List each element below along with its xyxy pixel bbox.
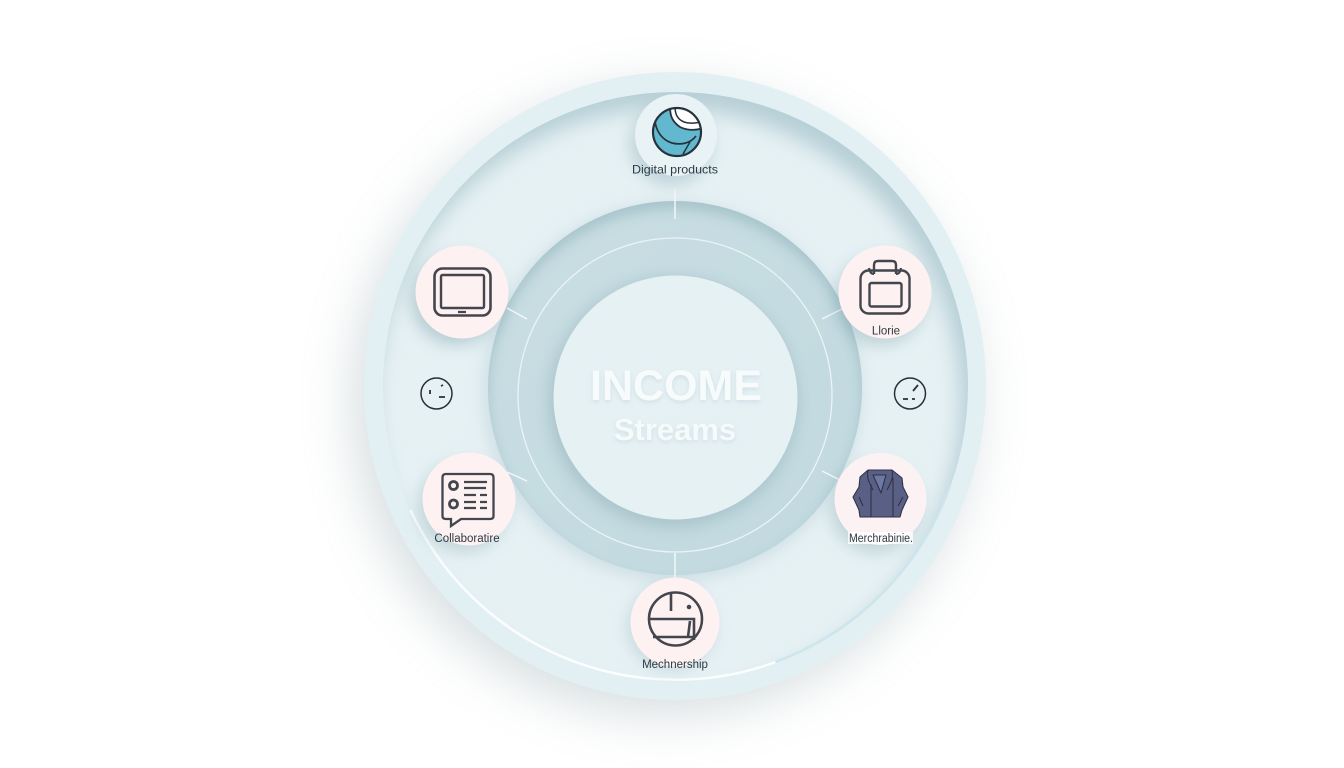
panel: outer disc xyxy=(334,70,994,734)
node: tablet xyxy=(411,246,508,345)
node: digital products xyxy=(630,94,718,185)
connector lines xyxy=(507,188,842,578)
label: Mechnership xyxy=(642,659,708,671)
label: Merchrabinie. xyxy=(849,533,913,545)
node: membership xyxy=(628,578,720,671)
panel: inner ring xyxy=(480,200,864,583)
node: store xyxy=(835,246,932,345)
icon: left small dial xyxy=(421,378,452,409)
icon: right small dial xyxy=(894,378,926,409)
ring outline xyxy=(518,238,832,552)
subtitle: Streams: Streams xyxy=(614,412,736,447)
label: Llorie xyxy=(872,326,900,338)
node: collaborative xyxy=(418,452,516,552)
icon: tablet xyxy=(434,268,490,316)
well inner shadow xyxy=(383,92,968,620)
label: Digital products xyxy=(632,162,718,176)
icon: circle diagram xyxy=(649,592,702,646)
title: INCOME: INCOME xyxy=(590,362,762,410)
icon: chat list xyxy=(442,474,494,526)
label: Collaboratire xyxy=(434,533,500,545)
node: merchandise xyxy=(830,453,926,553)
icon: bag xyxy=(860,261,910,314)
icon: jacket xyxy=(853,470,908,517)
panel: centre disc xyxy=(549,276,798,526)
icon: globe xyxy=(653,106,704,156)
